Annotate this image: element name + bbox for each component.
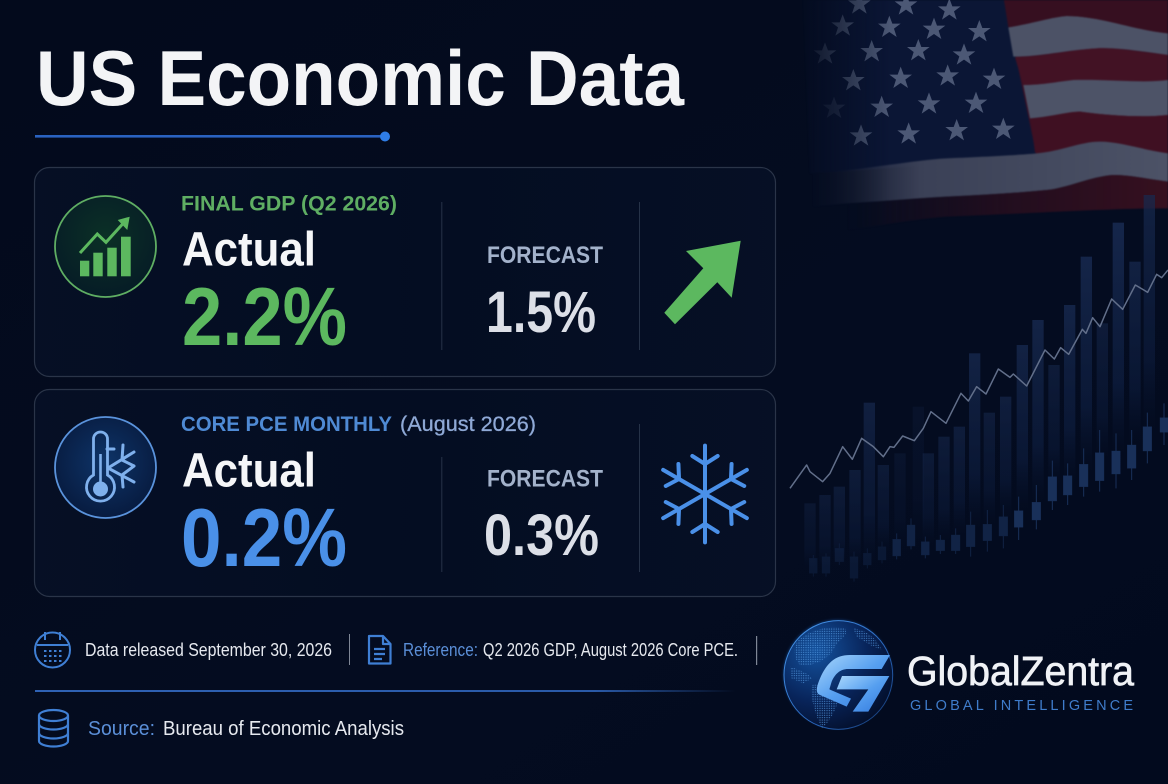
icon: rising bar chart	[55, 196, 156, 297]
icon: database	[39, 710, 68, 746]
footer: release date	[35, 632, 332, 668]
reference text	[403, 640, 738, 660]
icon: up arrow	[664, 241, 741, 324]
footer: reference	[369, 636, 738, 664]
PCE heading	[181, 412, 536, 436]
source text: Bureau of Economic Analysis	[163, 718, 404, 740]
icon: calendar	[35, 632, 70, 668]
divider left	[441, 457, 442, 572]
forecast value: 0.3%	[484, 503, 599, 568]
reference text: Q2 2026 GDP, August 2026 Core PCE.	[483, 640, 738, 660]
actual value: 2.2%	[182, 270, 347, 363]
PCE heading: CORE PCE MONTHLY	[181, 412, 392, 436]
panel: final GDP	[34, 168, 776, 376]
panel: core PCE	[34, 390, 776, 596]
PCE heading: (August 2026)	[400, 413, 536, 436]
footer divider	[349, 634, 350, 665]
forecast value: 1.5%	[486, 280, 596, 345]
icon: thermometer with snowflake	[55, 417, 156, 518]
reference text: Reference:	[403, 640, 478, 660]
actual label: Actual	[182, 224, 316, 276]
bars	[804, 195, 1155, 570]
footer divider	[756, 636, 757, 665]
brand tagline: GLOBAL INTELLIGENCE	[910, 698, 1133, 714]
footer rule	[35, 690, 735, 692]
release date text: Data released September 30, 2026	[85, 640, 332, 660]
panel frame	[34, 168, 776, 376]
divider right	[639, 202, 640, 350]
divider right	[639, 424, 640, 572]
trend line	[790, 270, 1168, 488]
title: US Economic Data	[36, 34, 685, 122]
candlesticks	[809, 403, 1168, 582]
divider left	[441, 202, 442, 350]
icon: snowflake	[657, 446, 753, 542]
icon: globe with G mark	[783, 620, 893, 729]
title underline	[35, 132, 390, 142]
actual value: 0.2%	[181, 491, 347, 584]
brand name: GlobalZentra	[907, 648, 1134, 694]
actual label: Actual	[182, 444, 316, 498]
GDP heading: FINAL GDP (Q2 2026)	[181, 192, 397, 216]
forecast label: FORECAST	[487, 242, 603, 269]
footer: source	[39, 710, 404, 746]
forecast label: FORECAST	[487, 466, 603, 492]
background: US flag	[803, 0, 1168, 230]
logo: GlobalZentra	[783, 620, 1134, 729]
icon: document	[369, 636, 390, 664]
background: financial chart	[790, 195, 1168, 582]
source text: Source:	[88, 718, 155, 740]
panel frame	[34, 390, 776, 596]
